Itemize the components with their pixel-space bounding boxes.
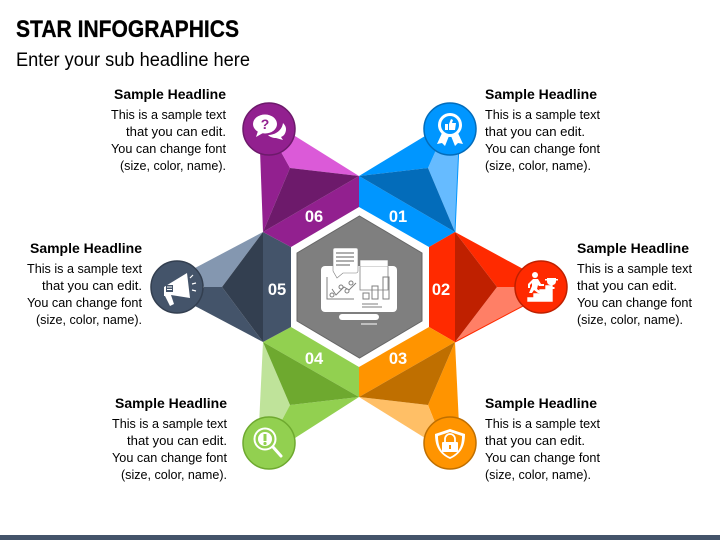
text block 05 bbox=[27, 240, 142, 327]
text block 06: You can change font bbox=[111, 141, 226, 156]
text block 02: This is a sample text bbox=[577, 261, 692, 276]
text block 06: Sample Headline bbox=[114, 86, 226, 102]
segment 01 blue bbox=[359, 103, 476, 247]
segment 04 green bbox=[243, 327, 359, 469]
text block 02: Sample Headline bbox=[577, 240, 689, 256]
number 05: 05 bbox=[268, 281, 286, 299]
segment 05 slate bbox=[151, 232, 291, 342]
number 04: 04 bbox=[305, 350, 324, 368]
text block 01: (size, color, name). bbox=[485, 158, 591, 173]
text block 02: (size, color, name). bbox=[577, 312, 683, 327]
segment 06 purple bbox=[243, 103, 359, 247]
text block 06: that you can edit. bbox=[126, 124, 226, 139]
text block 03 bbox=[485, 395, 600, 482]
text block 03: that you can edit. bbox=[485, 433, 585, 448]
text block 01: This is a sample text bbox=[485, 107, 600, 122]
text block 02 bbox=[577, 240, 692, 327]
text block 03: (size, color, name). bbox=[485, 467, 591, 482]
segment 03 orange bbox=[359, 327, 476, 469]
text block 01: that you can edit. bbox=[485, 124, 585, 139]
title: STAR INFOGRAPHICS bbox=[16, 16, 239, 43]
icon: megaphone bbox=[151, 261, 203, 313]
icon: climbing steps to trophy bbox=[515, 261, 567, 313]
text block 06: (size, color, name). bbox=[120, 158, 226, 173]
number 06: 06 bbox=[305, 208, 323, 226]
number 03: 03 bbox=[389, 350, 407, 368]
number 02: 02 bbox=[432, 281, 450, 299]
text block 01: You can change font bbox=[485, 141, 600, 156]
icon: shield with lock bbox=[424, 417, 476, 469]
text block 05: Sample Headline bbox=[30, 240, 142, 256]
center hexagon bbox=[297, 216, 422, 358]
text block 01 bbox=[485, 86, 600, 173]
text block 04: Sample Headline bbox=[115, 395, 227, 411]
text block 02: You can change font bbox=[577, 295, 692, 310]
text block 05: You can change font bbox=[27, 295, 142, 310]
text block 03: You can change font bbox=[485, 450, 600, 465]
text block 01: Sample Headline bbox=[485, 86, 597, 102]
text block 03: Sample Headline bbox=[485, 395, 597, 411]
text block 04: that you can edit. bbox=[127, 433, 227, 448]
text block 04: This is a sample text bbox=[112, 416, 227, 431]
icon: question speech bubbles: ? bbox=[261, 116, 269, 132]
subtitle: Enter your sub headline here bbox=[16, 50, 250, 71]
segment 02 red bbox=[429, 232, 567, 342]
icon: magnifier with exclamation bbox=[243, 417, 295, 469]
number 01: 01 bbox=[389, 208, 407, 226]
text block 03: This is a sample text bbox=[485, 416, 600, 431]
text block 02: that you can edit. bbox=[577, 278, 677, 293]
text block 04: (size, color, name). bbox=[121, 467, 227, 482]
icon: award badge bbox=[424, 103, 476, 155]
text block 05: (size, color, name). bbox=[36, 312, 142, 327]
text block 05: that you can edit. bbox=[42, 278, 142, 293]
text block 05: This is a sample text bbox=[27, 261, 142, 276]
text block 06 bbox=[111, 86, 226, 173]
footer bar bbox=[0, 535, 720, 540]
text block 04: You can change font bbox=[112, 450, 227, 465]
text block 04 bbox=[112, 395, 227, 482]
text block 06: This is a sample text bbox=[111, 107, 226, 122]
icon: question speech bubbles bbox=[243, 103, 295, 155]
icon: analytics monitor bbox=[321, 248, 397, 324]
